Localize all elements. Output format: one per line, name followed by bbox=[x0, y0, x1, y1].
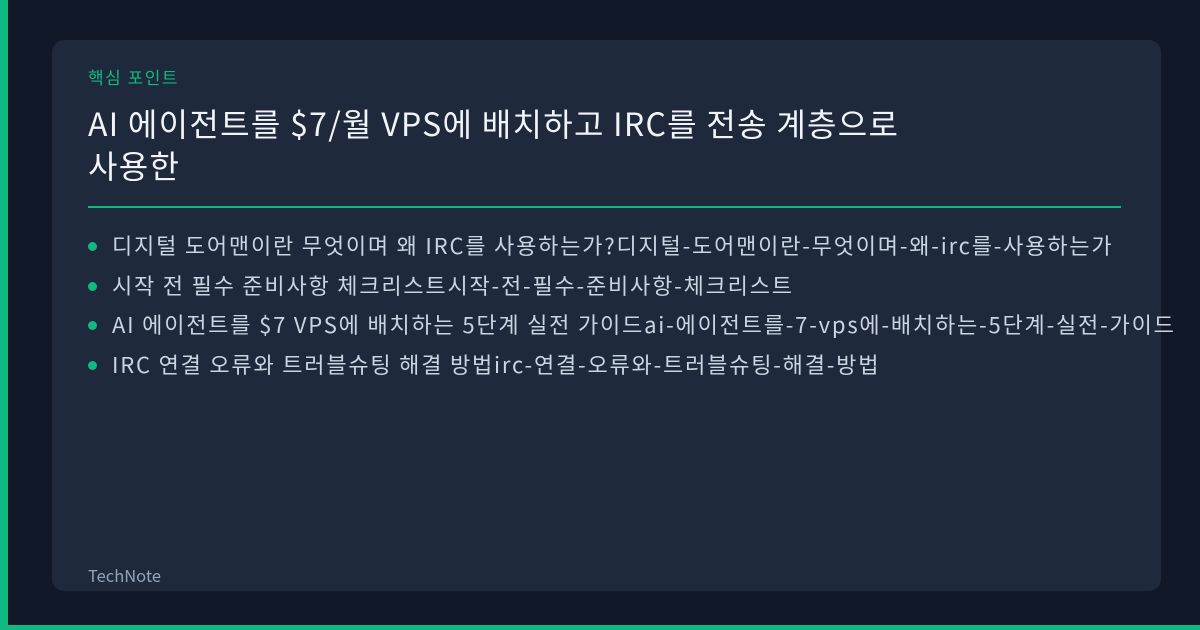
bullet 2: 시작 전 필수 준비사항 체크리스트시작-전-필수-준비사항-체크리스트 bbox=[112, 269, 794, 301]
title bbox=[88, 100, 899, 188]
bullet 3: AI 에이전트를 $7 VPS에 배치하는 5단계 실전 가이드ai-에이전트를-7-vps에-배치하는-5단계-실전-가이드 bbox=[112, 308, 1176, 340]
label: 핵심 포인트 bbox=[88, 64, 179, 89]
bullet 1: 디지털 도어맨이란 무엇이며 왜 IRC를 사용하는가?디지털-도어맨이란-무엇이며-왜-irc를-사용하는가 bbox=[112, 229, 1113, 261]
bullet list bbox=[88, 229, 1176, 380]
title: 사용한 bbox=[88, 142, 180, 188]
title: AI 에이전트를 $7/월 VPS에 배치하고 IRC를 전송 계층으로 bbox=[88, 100, 899, 146]
footer: TechNote bbox=[88, 563, 161, 587]
bullet 4: IRC 연결 오류와 트러블슈팅 해결 방법irc-연결-오류와-트러블슈팅-해결-방법 bbox=[112, 348, 880, 380]
